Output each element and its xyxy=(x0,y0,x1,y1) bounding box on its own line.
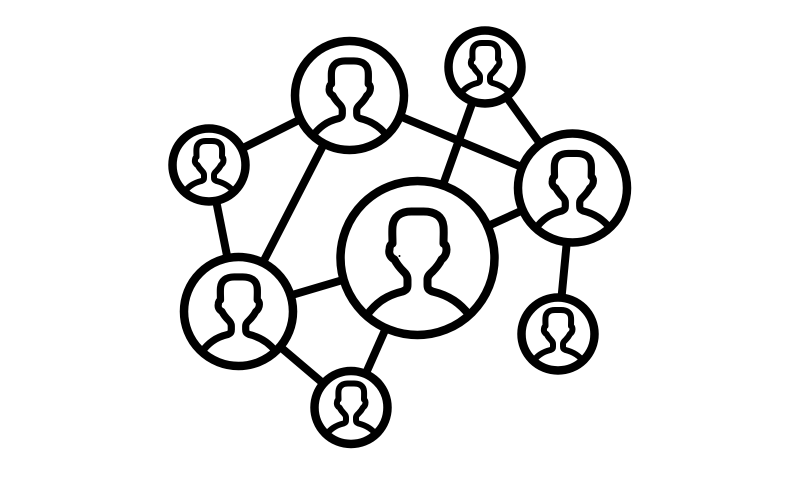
node: bottom small person xyxy=(314,371,388,444)
node: left medium person xyxy=(184,257,293,366)
node: top small person xyxy=(448,30,522,104)
node: left small person xyxy=(172,128,246,202)
node: large centre person xyxy=(340,181,494,335)
node: right medium person xyxy=(518,134,627,242)
node: lower-right small person xyxy=(522,298,594,370)
connecting lines xyxy=(209,67,572,407)
node: upper-left medium person xyxy=(295,41,404,150)
